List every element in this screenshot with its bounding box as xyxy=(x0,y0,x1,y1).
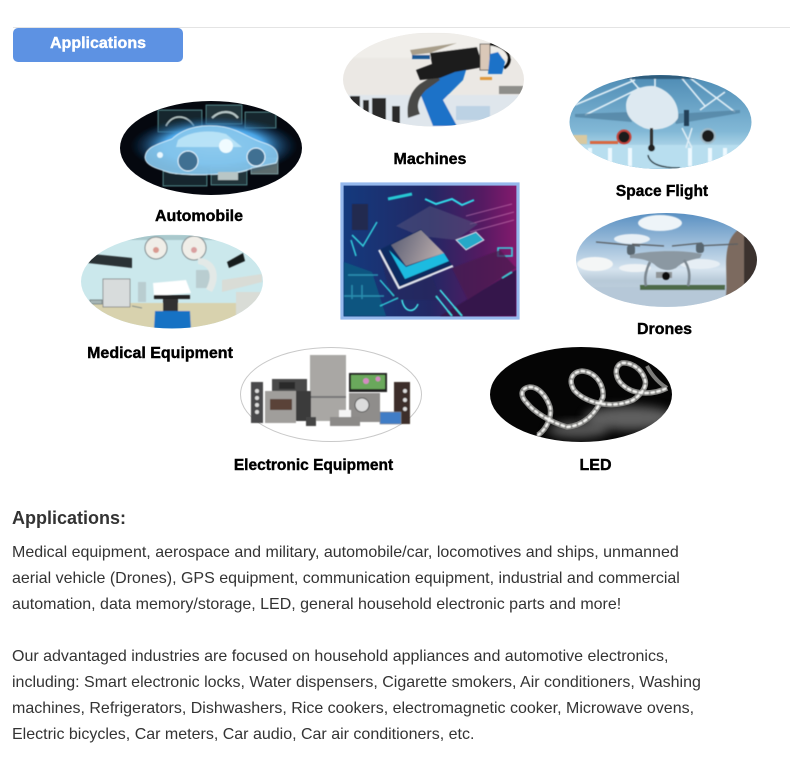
image: LED xyxy=(490,347,676,442)
image: Space Flight xyxy=(569,75,753,169)
image: Electronic Equipment xyxy=(240,348,422,442)
label: LED: LED xyxy=(580,457,612,474)
paragraph: applications list: Medical equipment, aerospace and military, automobile/car, locomotives and ships, unmanned xyxy=(12,544,679,561)
paragraph: advantaged industries: including: Smart electronic locks, Water dispensers, Cigarette smokers, Air conditioners, Washing xyxy=(12,674,701,691)
heading badge: Applications xyxy=(13,28,183,62)
image: Automobile xyxy=(120,101,302,195)
paragraph: advantaged industries xyxy=(12,648,701,743)
paragraph: applications list xyxy=(12,544,680,613)
section heading: Applications: xyxy=(12,508,126,528)
heading badge: Applications: Applications xyxy=(50,35,146,52)
label: Electronic Equipment: Electronic Equipment xyxy=(234,457,393,474)
image: Machines xyxy=(343,33,525,127)
paragraph: advantaged industries: Electric bicycles, Car meters, Car audio, Car air conditioners, etc. xyxy=(12,726,474,743)
paragraph: advantaged industries: machines, Refrigerators, Dishwashers, Rice cookers, electromagnetic cooker, Microwave ovens, xyxy=(12,700,694,717)
label: Space Flight: Space Flight xyxy=(616,183,708,200)
paragraph: applications list: aerial vehicle (Drones), GPS equipment, communication equipment, industrial and commercial xyxy=(12,570,680,587)
paragraph: applications list: automation, data memory/storage, LED, general household electronic parts and more! xyxy=(12,596,621,613)
label: Automobile: Automobile xyxy=(155,208,243,225)
image: Drones xyxy=(576,213,760,307)
image: central circuit board chip xyxy=(342,184,518,318)
label: Machines: Machines xyxy=(394,151,466,168)
paragraph: advantaged industries: Our advantaged industries are focused on household appliances and automotive electronics, xyxy=(12,648,668,665)
application photo illustrations xyxy=(81,33,757,442)
label: Medical Equipment: Medical Equipment xyxy=(87,345,233,362)
label: Drones: Drones xyxy=(637,321,692,338)
image: Medical Equipment xyxy=(81,235,263,329)
